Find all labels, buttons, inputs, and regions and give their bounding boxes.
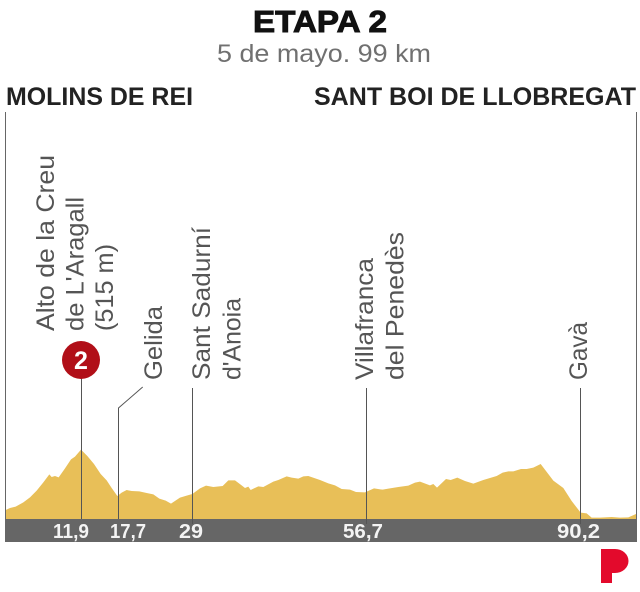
distance labels: 17,7 <box>110 521 146 543</box>
mountain pass badge <box>62 341 100 379</box>
label: Sant Sadurní d'Anoia <box>188 227 246 380</box>
label: Alto de la Creu de L'Aragall: de L'Aragall <box>62 197 90 331</box>
label: Alto de la Creu de L'Aragall <box>32 155 119 331</box>
label: Alto de la Creu de L'Aragall: Alto de la Creu <box>32 155 60 331</box>
subtitle: 5 de mayo. 99 km <box>217 40 431 68</box>
distance labels <box>53 521 600 543</box>
elevation profile <box>6 450 636 519</box>
finish town: SANT BOI DE LLOBREGAT <box>314 83 636 111</box>
label: Gavà: Gavà <box>565 322 593 380</box>
start town: MOLINS DE REI <box>6 83 193 111</box>
title: ETAPA 2 <box>253 4 387 39</box>
label: Villafranca del Penedès: Villafranca <box>351 258 379 380</box>
label: Villafranca del Penedès: del Penedès <box>382 232 410 380</box>
distance labels: 90,2 <box>557 521 600 543</box>
label: Villafranca del Penedès <box>351 232 410 380</box>
start and finish lines <box>6 112 636 519</box>
mountain pass badge: 2 <box>74 347 88 375</box>
label: Sant Sadurní d'Anoia: d'Anoia <box>218 298 246 380</box>
label: Sant Sadurní d'Anoia: Sant Sadurní <box>188 227 216 380</box>
distance labels: 56,7 <box>343 521 383 543</box>
label: Alto de la Creu de L'Aragall: (515 m) <box>91 244 119 331</box>
label: Gelida: Gelida <box>140 306 168 380</box>
distance bar <box>5 519 637 542</box>
distance labels: 29 <box>179 521 203 543</box>
marker lines <box>82 378 580 524</box>
distance labels: 11,9 <box>53 521 89 543</box>
logo: P <box>601 549 628 583</box>
